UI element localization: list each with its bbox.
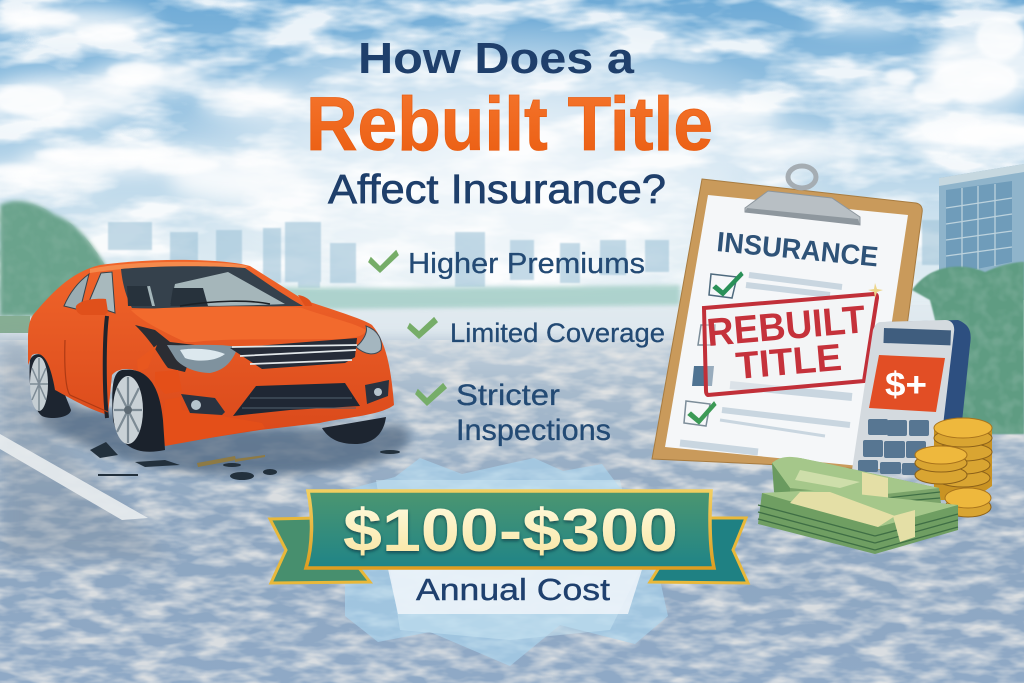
hood	[131, 306, 366, 342]
small sparkle	[868, 283, 883, 298]
item: stricter inspections	[416, 379, 611, 447]
road grey wash left	[0, 340, 170, 560]
rebuilt title stamp: REBUILT	[705, 298, 867, 355]
gold coin stacks	[915, 418, 992, 517]
clipboard board	[652, 179, 922, 470]
ribbon left tail	[270, 518, 370, 583]
annual cost label: Annual Cost	[416, 572, 610, 607]
damaged orange car	[28, 260, 400, 480]
checkbox 1	[709, 272, 743, 298]
cost ribbon banner	[270, 491, 748, 583]
crumpled bumper	[155, 370, 265, 446]
paper	[665, 195, 908, 467]
headlight right	[356, 326, 381, 354]
stacks of cash	[758, 457, 958, 554]
background: sky	[0, 0, 1024, 330]
item: limited coverage: Limited Coverage	[450, 318, 665, 348]
background: left trees	[0, 200, 680, 333]
rebuilt title stamp: TITLE	[734, 337, 843, 388]
ribbon main	[306, 491, 714, 568]
translucent starburst behind banner	[345, 458, 668, 666]
door line	[105, 316, 107, 418]
damaged fender	[135, 325, 195, 372]
background: central haze behind title	[160, 20, 840, 320]
road shadow under car	[40, 395, 409, 475]
cost value: $100-$300	[343, 497, 678, 564]
debris	[90, 442, 400, 480]
upper cash stack	[772, 457, 941, 505]
background: horizon haze	[0, 300, 1024, 336]
calculator	[852, 320, 971, 475]
background: right trees	[912, 258, 1024, 436]
rear wheel	[30, 354, 71, 418]
background: hazy city skyline	[108, 220, 942, 288]
clip	[745, 166, 860, 225]
side windows	[64, 274, 89, 310]
form lines	[680, 275, 852, 452]
background: road texture	[0, 340, 1024, 683]
fog lamp left	[181, 394, 225, 415]
checkbox 2	[698, 325, 715, 345]
background: office building	[939, 164, 1024, 300]
title line 2: Rebuilt Title	[306, 82, 713, 167]
item: stricter inspections: Inspections	[456, 414, 611, 447]
checklist of effects	[369, 248, 665, 447]
windshield	[121, 266, 303, 309]
background: ground	[0, 305, 1024, 683]
fog lamp right	[365, 380, 389, 404]
roof highlight	[90, 262, 248, 273]
wing mirror	[76, 299, 108, 315]
item: stricter inspections: Stricter	[456, 379, 560, 412]
background: cloud texture	[0, 0, 1024, 290]
lower grille	[233, 383, 360, 416]
background: clouds	[0, 8, 1024, 200]
paper heading: INSURANCE	[715, 226, 880, 272]
calculator: $+	[885, 366, 927, 404]
headlight left	[167, 345, 238, 373]
title line 3: Affect Insurance?	[328, 166, 666, 212]
title	[306, 34, 713, 212]
lane marking on road	[0, 434, 148, 520]
debris: bent rod	[197, 455, 265, 467]
checkbox 3	[692, 366, 714, 386]
grille	[230, 338, 357, 369]
item: higher premiums: Higher Premiums	[408, 248, 645, 280]
checkbox 4	[684, 401, 716, 426]
lower cash stack	[758, 490, 958, 554]
ribbon right tail	[650, 518, 748, 583]
rebuilt title stamp	[704, 294, 877, 395]
car body	[28, 260, 394, 445]
title line 1: How Does a	[358, 34, 635, 83]
front wheel	[112, 370, 165, 452]
front right wheel	[322, 417, 386, 444]
clipboard with insurance form	[652, 166, 922, 470]
